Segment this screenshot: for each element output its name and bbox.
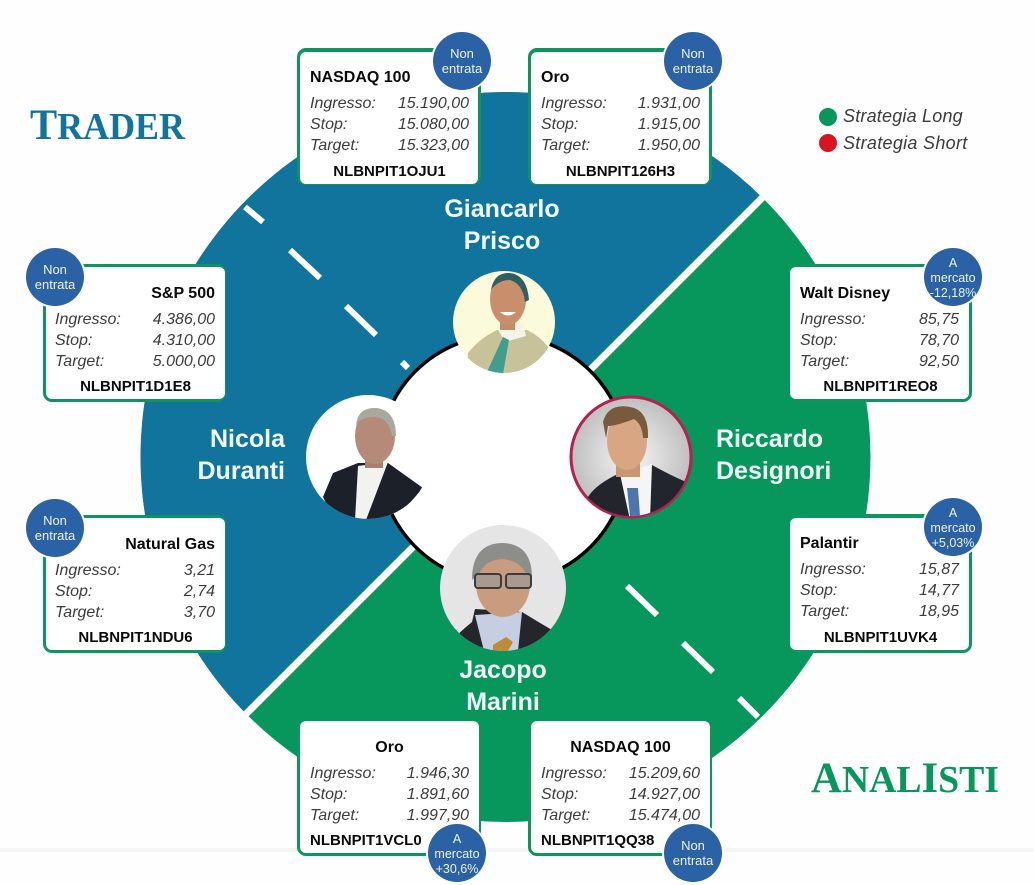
card: NASDAQ 100 (Prisco): NASDAQ 100 <box>310 69 411 86</box>
card: Palantir (Designori): 18,95 <box>919 603 959 620</box>
card: S&P 500 (Duranti): 4.310,00 <box>153 332 215 349</box>
card: Walt Disney (Designori): 92,50 <box>919 353 959 370</box>
octagonal wheel background <box>130 85 880 830</box>
card: NASDAQ 100 (Marini) <box>528 721 724 884</box>
legend <box>819 106 968 153</box>
card: NASDAQ 100 (Prisco): Non <box>450 46 474 61</box>
card: NASDAQ 100 (Marini): Non <box>681 838 705 853</box>
name: Riccardo Designori <box>716 425 831 485</box>
card: S&P 500 (Duranti): Non <box>43 262 67 277</box>
card: Walt Disney (Designori): 85,75 <box>919 311 959 328</box>
inner white ring <box>379 335 627 583</box>
card: Walt Disney (Designori): -12,18% <box>930 286 976 300</box>
card: Palantir (Designori): Palantir <box>800 535 859 552</box>
card: Oro (Prisco): Ingresso: <box>541 95 607 112</box>
name: Nicola Duranti <box>198 425 286 485</box>
card: Natural Gas (Duranti): NLBNPIT1NDU6 <box>78 629 193 646</box>
card: NASDAQ 100 (Prisco): Ingresso: <box>310 95 376 112</box>
card: NASDAQ 100 (Prisco) <box>297 30 493 185</box>
card: NASDAQ 100 (Prisco): NLBNPIT1OJU1 <box>333 163 446 180</box>
legend: Strategia Long <box>843 106 963 126</box>
card: S&P 500 (Duranti): Ingresso: <box>55 311 121 328</box>
card: Palantir (Designori): mercato <box>930 521 976 535</box>
card: NASDAQ 100 (Marini): Target: <box>541 807 590 824</box>
card: Oro (Marini) <box>297 721 488 884</box>
card: S&P 500 (Duranti): Target: <box>55 353 104 370</box>
card: Natural Gas (Duranti): entrata <box>35 528 76 543</box>
card: Palantir (Designori): Ingresso: <box>800 561 866 578</box>
card: Walt Disney (Designori): Walt Disney <box>800 285 890 302</box>
card: Oro (Prisco): 1.915,00 <box>638 116 700 133</box>
card: NASDAQ 100 (Marini): Stop: <box>541 786 578 803</box>
card: Walt Disney (Designori): mercato <box>930 271 976 285</box>
card: Oro (Prisco) <box>528 30 724 185</box>
card: Palantir (Designori): Stop: <box>800 582 837 599</box>
card: NASDAQ 100 (Prisco): 15.323,00 <box>398 137 469 154</box>
card: NASDAQ 100 (Prisco): Target: <box>310 137 359 154</box>
card: Natural Gas (Duranti): Target: <box>55 604 104 621</box>
card: Natural Gas (Duranti): Natural Gas <box>125 536 215 553</box>
card: Natural Gas (Duranti): Non <box>43 513 67 528</box>
card: NASDAQ 100 (Prisco): entrata <box>442 61 483 76</box>
card: Walt Disney (Designori): Stop: <box>800 332 837 349</box>
name: Riccardo Designori: Riccardo <box>716 425 823 453</box>
card: Walt Disney (Designori): 78,70 <box>919 332 959 349</box>
card: Oro (Prisco): Non <box>681 46 705 61</box>
card: NASDAQ 100 (Marini): entrata <box>673 853 714 868</box>
card: Walt Disney (Designori): NLBNPIT1REO8 <box>823 378 938 395</box>
card: Oro (Marini): Ingresso: <box>310 765 376 782</box>
name: Nicola Duranti: Nicola <box>210 425 286 453</box>
name: Giancarlo Prisco: Prisco <box>464 227 540 255</box>
card: Natural Gas (Duranti) <box>24 497 226 653</box>
card: NASDAQ 100 (Prisco): Stop: <box>310 116 347 133</box>
name: Jacopo Marini <box>459 656 547 716</box>
card: Oro (Prisco): Oro <box>541 69 570 86</box>
card: Oro (Marini): 1.997,90 <box>407 807 469 824</box>
legend: Strategia Short <box>843 133 968 153</box>
card: Oro (Marini): Target: <box>310 807 359 824</box>
card: S&P 500 (Duranti): S&P 500 <box>151 285 215 302</box>
card: NASDAQ 100 (Marini): NLBNPIT1QQ38 <box>541 832 654 849</box>
card: Oro (Marini): mercato <box>434 847 480 861</box>
card: Oro (Prisco): Stop: <box>541 116 578 133</box>
card: Palantir (Designori): A <box>949 506 958 520</box>
card: Walt Disney (Designori): A <box>949 256 958 270</box>
card: NASDAQ 100 (Marini): 15.474,00 <box>629 807 700 824</box>
portrait: Giancarlo Prisco <box>453 271 555 373</box>
name: Giancarlo Prisco <box>444 195 560 255</box>
card: Oro (Marini): Stop: <box>310 786 347 803</box>
card: Palantir (Designori): +5,03% <box>932 536 974 550</box>
card: Palantir (Designori): 14,77 <box>919 582 960 599</box>
card: S&P 500 (Duranti): entrata <box>35 277 76 292</box>
card: Oro (Prisco): 1.950,00 <box>638 137 700 154</box>
card: Oro (Marini): NLBNPIT1VCL0 <box>310 832 422 849</box>
card: NASDAQ 100 (Prisco): 15.080,00 <box>398 116 469 133</box>
card: Oro (Marini): 1.891,60 <box>407 786 469 803</box>
name: Giancarlo Prisco: Giancarlo <box>444 195 560 223</box>
card: Oro (Prisco): 1.931,00 <box>638 95 700 112</box>
name: Jacopo Marini: Jacopo <box>459 656 547 684</box>
card: Walt Disney (Designori): Ingresso: <box>800 311 866 328</box>
card: Palantir (Designori): Target: <box>800 603 849 620</box>
card: S&P 500 (Duranti) <box>24 246 226 402</box>
name: Nicola Duranti: Duranti <box>198 457 285 485</box>
card: NASDAQ 100 (Prisco): 15.190,00 <box>398 95 469 112</box>
card: Natural Gas (Duranti): 3,21 <box>184 562 215 579</box>
portrait: Riccardo Designori <box>571 397 691 520</box>
card: NASDAQ 100 (Marini): 15.209,60 <box>629 765 700 782</box>
card: S&P 500 (Duranti): 5.000,00 <box>153 353 215 370</box>
card: Walt Disney (Designori): Target: <box>800 353 849 370</box>
card: Oro (Marini): +30,6% <box>436 862 478 876</box>
card: S&P 500 (Duranti): 4.386,00 <box>153 311 215 328</box>
card: Palantir (Designori): 15,87 <box>919 561 960 578</box>
card: Natural Gas (Duranti): 3,70 <box>184 604 215 621</box>
card: Walt Disney (Designori) <box>790 246 984 402</box>
name: Jacopo Marini: Marini <box>466 688 540 716</box>
card: Oro (Prisco): NLBNPIT126H3 <box>566 163 675 180</box>
card: Palantir (Designori) <box>790 496 984 653</box>
card: Palantir (Designori): NLBNPIT1UVK4 <box>824 629 938 646</box>
title: Analisti: ANALISTI <box>811 755 999 802</box>
portrait: Jacopo Marini <box>440 525 566 655</box>
card: Oro (Prisco): Target: <box>541 137 590 154</box>
card: S&P 500 (Duranti): Stop: <box>55 332 92 349</box>
card: Oro (Marini): Oro <box>375 739 404 756</box>
portrait: Nicola Duranti <box>306 395 422 519</box>
card: Oro (Marini): A <box>453 832 462 846</box>
card: NASDAQ 100 (Marini): NASDAQ 100 <box>570 739 671 756</box>
title: Trader: TRADER <box>30 102 186 149</box>
card: NASDAQ 100 (Marini): 14.927,00 <box>629 786 700 803</box>
name: Riccardo Designori: Designori <box>716 457 831 485</box>
card: S&P 500 (Duranti): NLBNPIT1D1E8 <box>80 378 191 395</box>
card: Oro (Marini): 1.946,30 <box>407 765 469 782</box>
card: Natural Gas (Duranti): Stop: <box>55 583 92 600</box>
card: Natural Gas (Duranti): Ingresso: <box>55 562 121 579</box>
card: Natural Gas (Duranti): 2,74 <box>183 583 215 600</box>
card: Oro (Prisco): entrata <box>673 61 714 76</box>
card: NASDAQ 100 (Marini): Ingresso: <box>541 765 607 782</box>
